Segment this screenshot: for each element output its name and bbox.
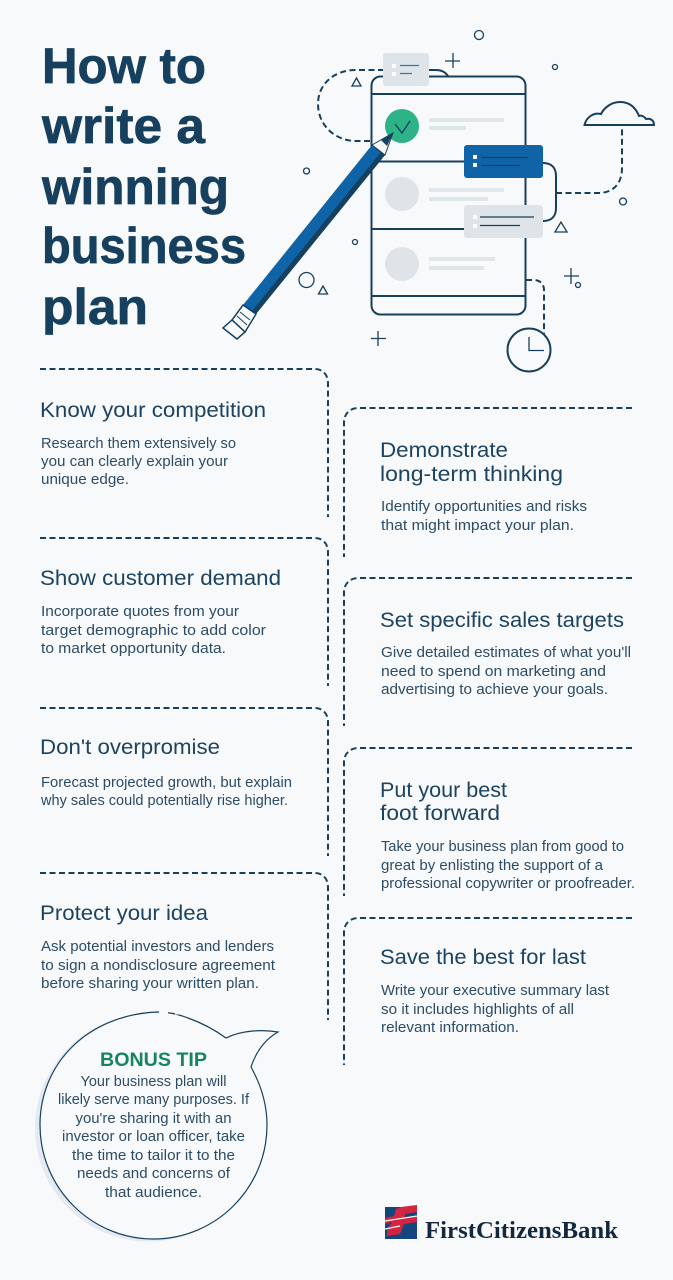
note card: top grey [383,53,429,86]
callout: bonus tip speech bubble [35,1012,278,1242]
panel: demonstrate long-term thinking: long-term thinking [380,462,563,486]
panel: know your competition: unique edge. [41,472,129,488]
callout: bonus tip speech bubble: needs and concerns of [77,1166,231,1182]
title: plan [42,279,148,335]
panel: put your best foot forward: great by enlisting the support of a [381,858,604,874]
panel: demonstrate long-term thinking: Demonstrate [380,438,508,462]
panel: show customer demand: Show customer demand [40,566,281,590]
callout: bonus tip speech bubble: the time to tailor it to the [72,1148,235,1164]
bubble outline [40,1012,278,1239]
panel: save the best for last: so it includes highlights of all [381,1002,574,1018]
panel: know your competition: Know your competition [40,398,266,422]
title [41,38,246,335]
panel: show customer demand: Incorporate quotes from your [41,604,239,620]
dashed connector to cloud [556,126,622,193]
panel: know your competition: you can clearly explain your [41,454,228,470]
logo flag [385,1205,417,1239]
panel: know your competition [40,369,328,517]
panel: put your best foot forward: foot forward [380,801,500,825]
panel: protect your idea: to sign a nondisclosure agreement [41,958,275,974]
icon: pencil [223,133,393,339]
panel: save the best for last: Save the best for last [380,945,586,969]
logo: First Citizens Bank: FirstCitizensBank [425,1218,619,1244]
checklist row 3 [385,247,495,281]
panel: show customer demand: to market opportunity data. [41,641,226,657]
checklist row 1 with green check [385,109,504,143]
callout: bonus tip speech bubble: you're sharing it with an [76,1111,232,1127]
dashed connector: top left loop [318,70,384,141]
icon: clock [508,328,550,372]
title: business [42,218,246,274]
decorative shapes: small circles, triangles, plus signs [299,30,626,346]
panel: set specific sales targets: Give detailed estimates of what you'll [381,645,631,661]
panel: know your competition: Research them extensively so [41,436,236,452]
panel: put your best foot forward [344,748,635,896]
title: How to [42,38,206,94]
phone outline [372,70,526,314]
note card: grey lower [464,205,543,238]
panel: show customer demand: target demographic to add color [41,623,266,639]
panel: set specific sales targets: advertising to achieve your goals. [381,682,608,698]
panel: put your best foot forward: Take your business plan from good to [381,839,624,855]
title: winning [41,159,229,215]
panel: show customer demand [40,538,328,686]
bracket joining the two cards [543,163,556,221]
logo: First Citizens Bank [385,1205,619,1244]
callout: bonus tip speech bubble: likely serve many purposes. If [58,1092,250,1108]
title: write a [41,98,206,154]
callout: bonus tip speech bubble: BONUS TIP [100,1049,207,1071]
bubble shadow [35,1014,262,1242]
panel: set specific sales targets [344,578,632,726]
panel: don't overpromise: why sales could potentially rise higher. [40,793,288,809]
panel: don't overpromise: Forecast projected growth, but explain [41,775,292,791]
panel: protect your idea [40,873,328,1020]
panel: demonstrate long-term thinking: that might impact your plan. [381,518,574,534]
panel: save the best for last: relevant information. [381,1020,519,1036]
panel: set specific sales targets: Set specific sales targets [380,608,624,632]
callout: bonus tip speech bubble: Your business plan will [80,1074,226,1090]
panel: don't overpromise: Don't overpromise [40,735,220,759]
dashed connector to clock [526,280,544,334]
callout: bonus tip speech bubble: investor or loan officer, take [62,1129,245,1145]
panel: protect your idea: Protect your idea [40,901,208,925]
callout: bonus tip speech bubble: that audience. [105,1185,202,1201]
panel: demonstrate long-term thinking: Identify opportunities and risks [381,499,587,515]
note card: blue [464,145,543,178]
checklist row 2 [385,177,504,211]
panel: protect your idea: Ask potential investors and lenders [41,939,274,955]
panel: put your best foot forward: Put your best [380,778,507,802]
panel: protect your idea: before sharing your written plan. [41,976,259,992]
panel: set specific sales targets: need to spend on marketing and [381,664,606,680]
panel: demonstrate long-term thinking [344,408,632,557]
panel: put your best foot forward: professional copywriter or proofreader. [381,876,635,892]
icon: cloud [584,102,654,125]
panel: save the best for last [344,918,632,1065]
panel: save the best for last: Write your executive summary last [381,983,609,999]
panel: don't overpromise [40,708,328,856]
